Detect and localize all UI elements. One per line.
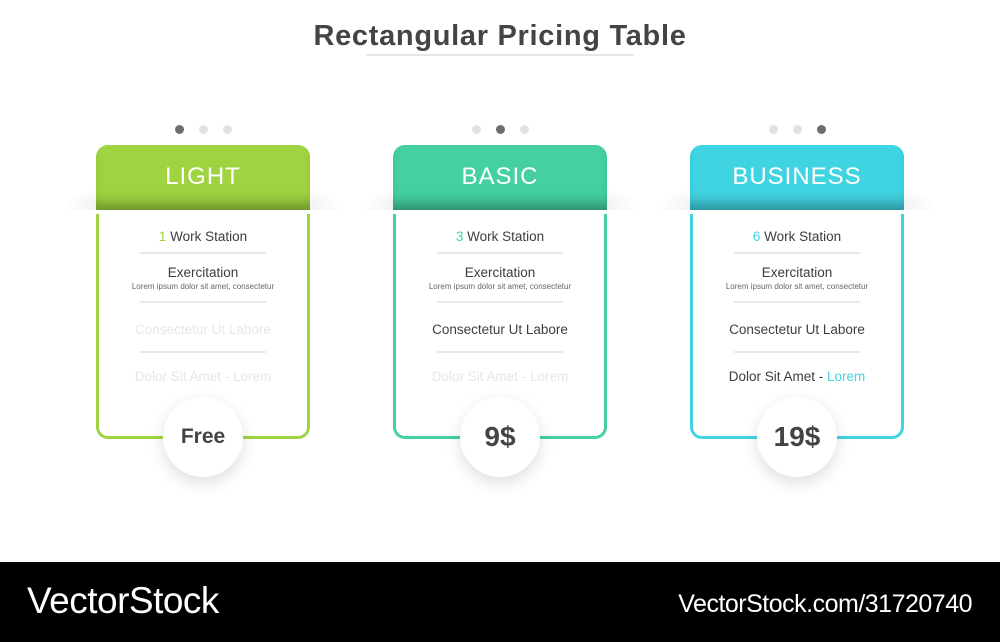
panel: BUSINESS [679,125,915,487]
card body: Lorem ipsum dolor sit amet, consectetur [726,282,868,291]
card body: 3 Work Station [456,229,544,244]
footer [0,562,1000,642]
panel: BASIC [382,125,618,487]
panel: LIGHT [85,125,321,487]
title: Rectangular Pricing Table [313,20,687,52]
card body: Exercitation [168,265,238,280]
card body [393,214,607,439]
card body: Lorem ipsum dolor sit amet, consectetur [132,282,274,291]
price circle: 19$ [774,421,820,452]
header: LIGHT: LIGHT [165,163,241,190]
header: BUSINESS [690,145,904,210]
price circle [163,397,243,477]
card body: Consectetur Ut Labore [135,322,271,337]
header: LIGHT [96,145,310,210]
header: BASIC: BASIC [461,163,539,190]
footer url: VectorStock.com/31720740 [678,590,972,618]
card body: 6 Work Station [753,229,841,244]
header: BASIC [393,145,607,210]
card body: Lorem ipsum dolor sit amet, consectetur [429,282,571,291]
page dots [769,125,826,134]
price circle [757,397,837,477]
price circle [460,397,540,477]
page dots [472,125,529,134]
card body: Consectetur Ut Labore [729,322,865,337]
price circle: Free [181,425,225,448]
card body: Exercitation [762,265,832,280]
card body: Dolor Sit Amet - Lorem [135,369,271,384]
card body: Dolor Sit Amet - Lorem [729,369,865,384]
card body [690,214,904,439]
card body [96,214,310,439]
card body: Consectetur Ut Labore [432,322,568,337]
header: BUSINESS: BUSINESS [732,163,862,190]
title underline [366,54,634,56]
footer logo: VectorStock [27,580,219,621]
card body: Exercitation [465,265,535,280]
card body: Dolor Sit Amet - Lorem [432,369,568,384]
page dots [175,125,232,134]
price circle: 9$ [484,421,516,452]
card body: 1 Work Station [159,229,247,244]
